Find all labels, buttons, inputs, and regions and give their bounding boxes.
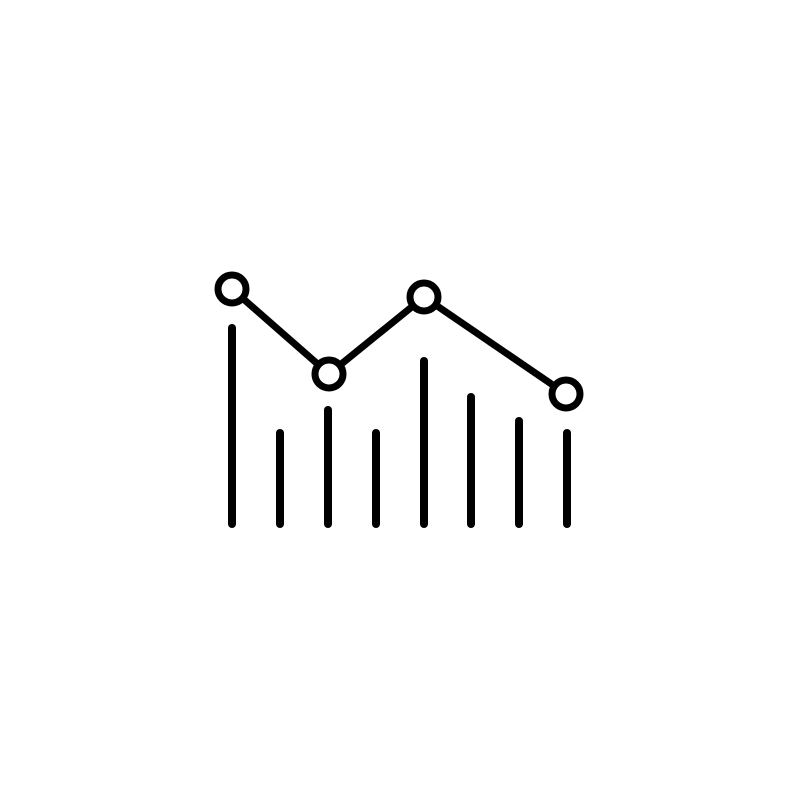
data points	[218, 275, 580, 408]
line graph	[232, 289, 566, 394]
bars	[232, 328, 567, 524]
